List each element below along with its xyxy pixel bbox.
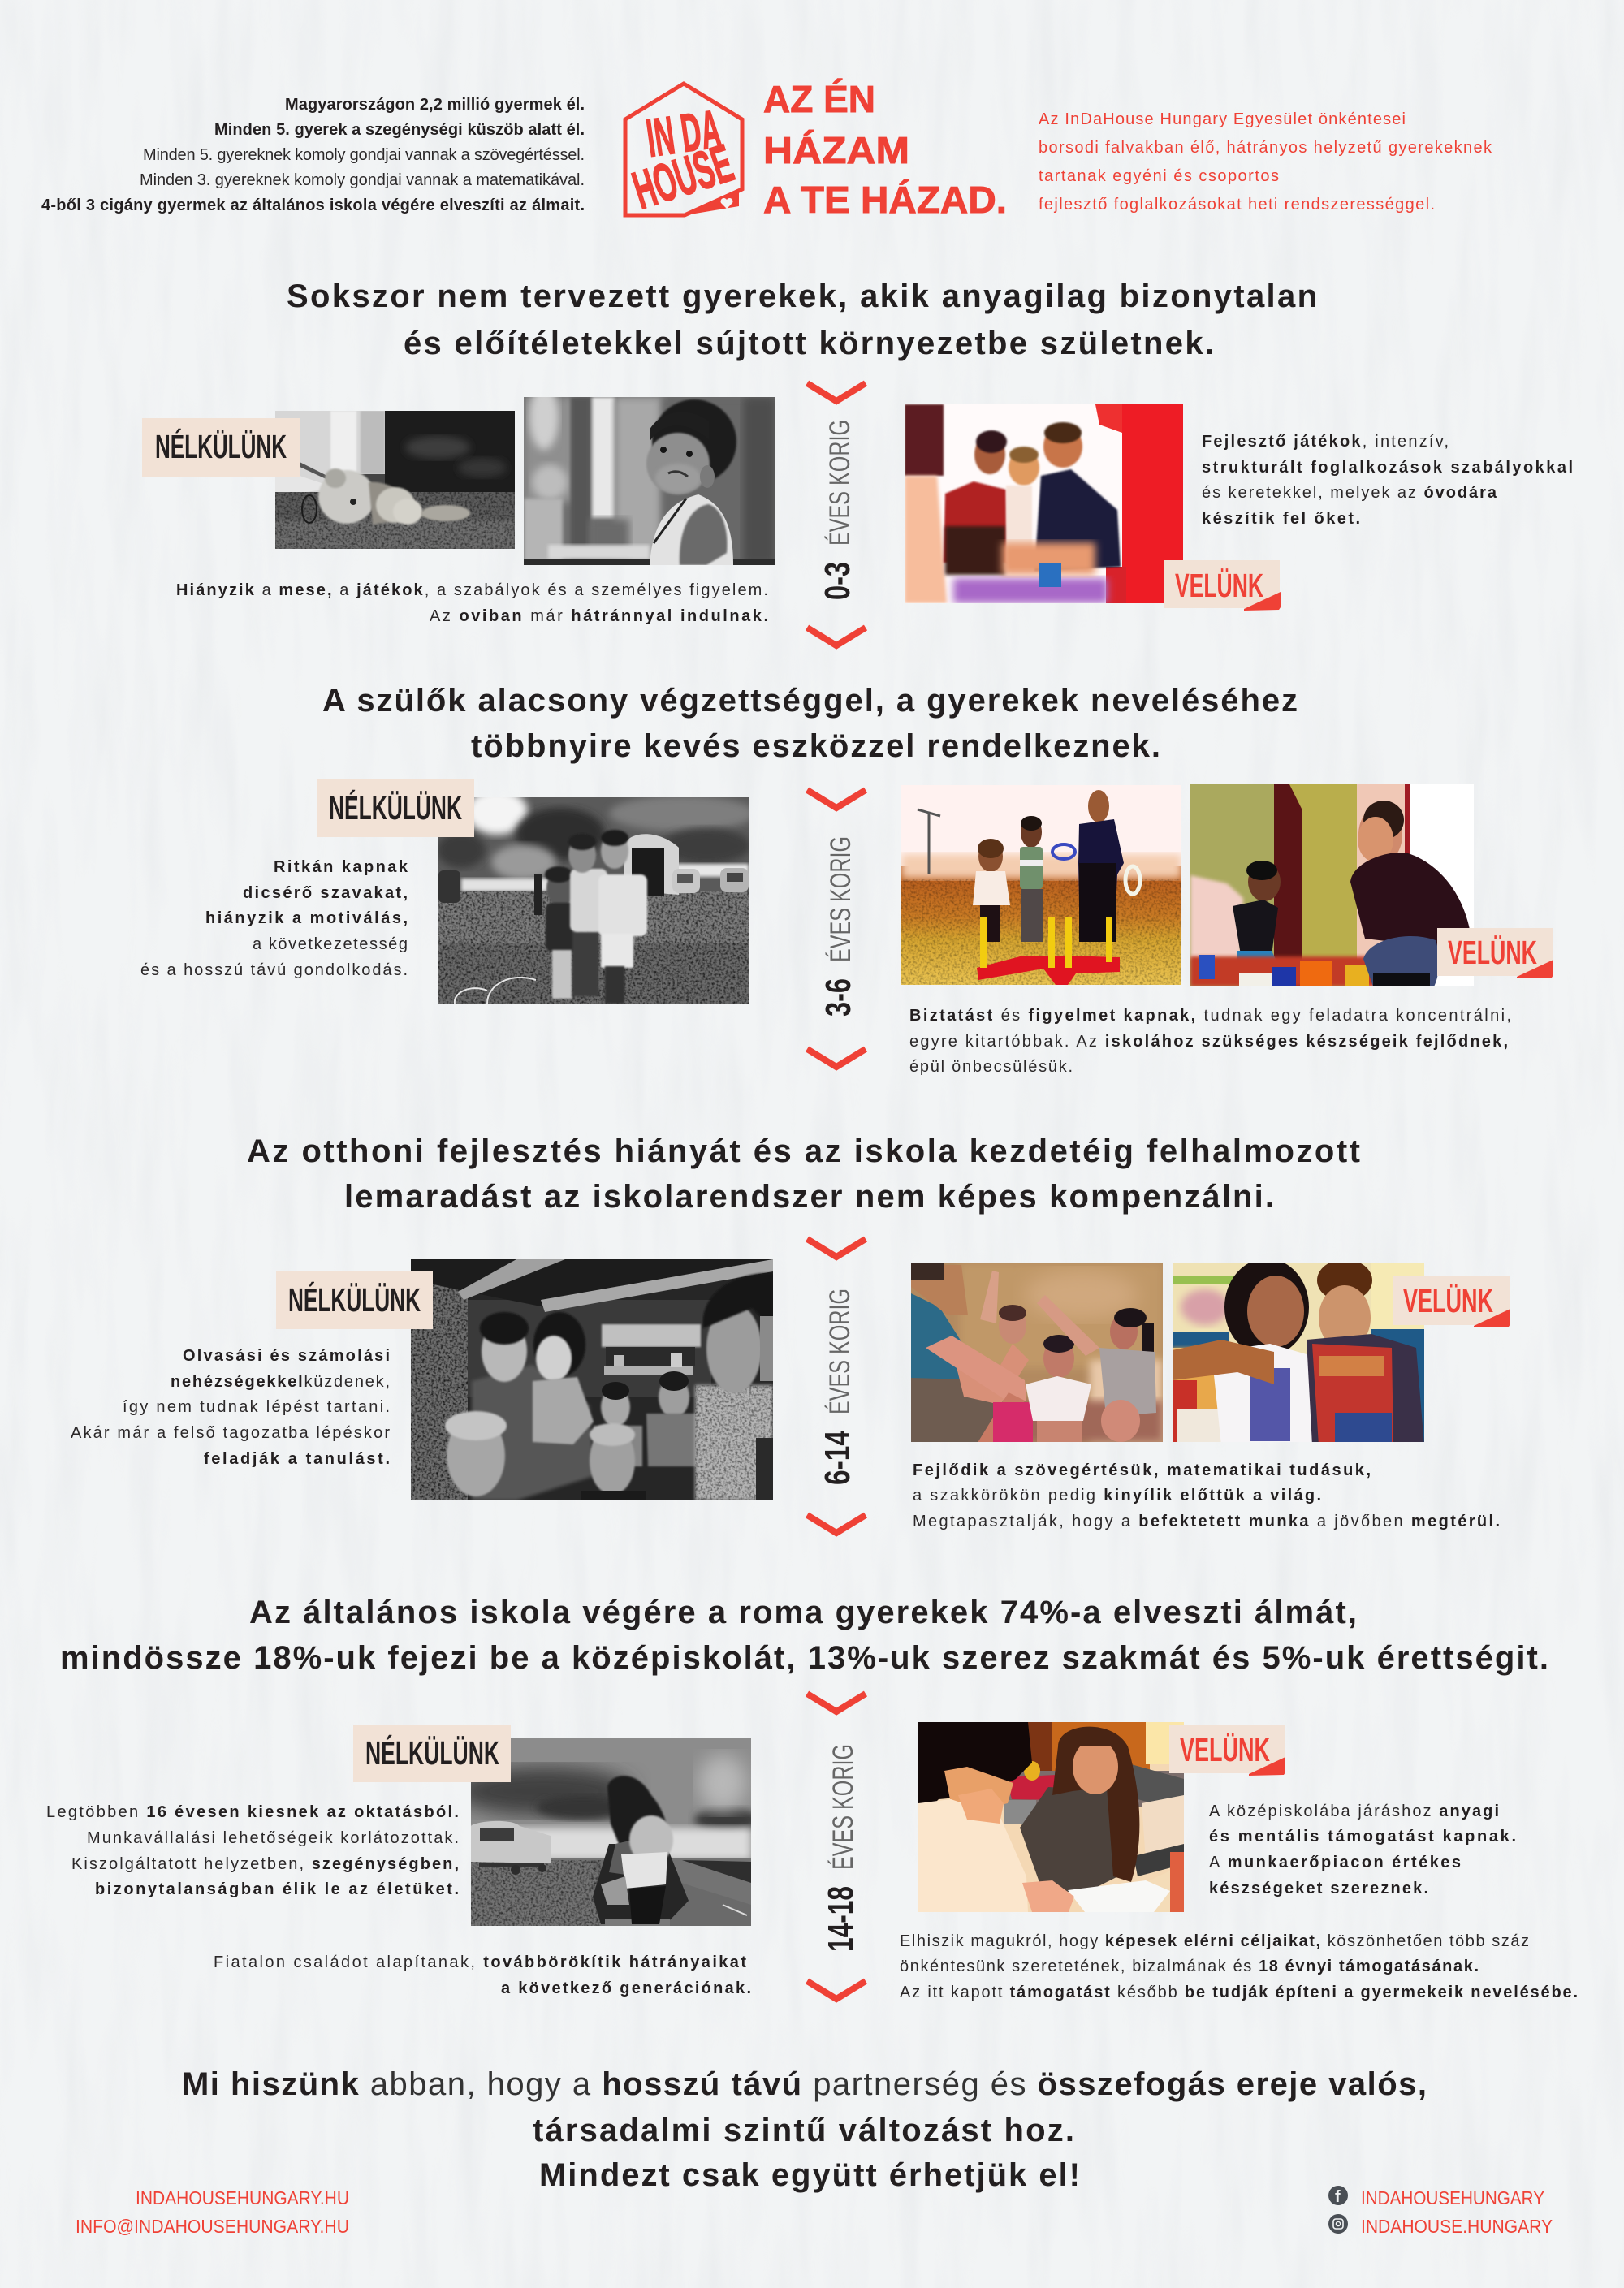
text: section 4 with us: A munkaerőpiacon értékes <box>1209 1854 1461 1871</box>
age label 0-3: ÉVES KORIG <box>824 420 856 546</box>
instagram handle: INDAHOUSE.HUNGARY <box>1361 2216 1553 2237</box>
age label 14-18 <box>821 1744 861 1952</box>
text: section 4 without us, consequence: Fiatalon családot alapítanak, továbbörökítik hátrányaikat <box>214 1953 746 1971</box>
slogan <box>763 78 1007 221</box>
closing statement: Mindezt csak együtt érhetjük el! <box>539 2157 1080 2193</box>
tag: with us <box>1164 560 1281 611</box>
tag: without us: NÉLKÜLÜNK <box>155 428 287 465</box>
contact links: INFO@INDAHOUSEHUNGARY.HU <box>76 2216 349 2237</box>
closing statement <box>182 2066 1427 2193</box>
text: section 1 with us: Fejlesztő játékok, intenzív, <box>1202 433 1449 451</box>
age label 3-6: ÉVES KORIG <box>825 836 857 962</box>
photo: mother with baby <box>471 1738 751 1926</box>
chevron: section 4 top <box>807 1694 866 1712</box>
photo: two smiling children <box>1173 1263 1424 1442</box>
text: section 2 without us: Ritkán kapnak <box>274 858 408 876</box>
photo: teenage girls studying <box>918 1722 1184 1912</box>
text: section 3 with us: Megtapasztalják, hogy a befektetett munka a jövőben megtérül. <box>913 1513 1500 1530</box>
text: section 1 without us <box>176 581 768 625</box>
association description: fejlesztő foglalkozásokat heti rendszerességgel. <box>1039 196 1435 214</box>
age label 0-3: 0-3 <box>818 562 857 600</box>
chevron: section 1 top <box>807 383 866 401</box>
text: section 3 with us <box>913 1461 1500 1530</box>
text: section 4 with us, outcome: Elhiszik magukról, hogy képesek elérni céljaikat, köszönhetően több száz <box>900 1932 1529 1950</box>
intro facts text: Magyarországon 2,2 millió gyermek él. <box>285 96 585 114</box>
tag: with us: VELÜNK <box>1180 1731 1270 1768</box>
photo: family in a poor home <box>411 1259 773 1500</box>
contact links <box>76 2187 349 2237</box>
text: section 4 without us: bizonytalanságban élik le az életüket. <box>95 1880 459 1898</box>
text: section 2 without us: dicsérő szavakat, <box>243 884 408 902</box>
slogan: AZ ÉN <box>763 78 875 120</box>
text: section 4 with us: és mentális támogatást kapnak. <box>1209 1828 1516 1846</box>
text: section 2 without us <box>140 858 408 979</box>
intro facts text: 4-ből 3 cigány gyermek az általános iskola végére elveszíti az álmait. <box>41 196 585 214</box>
heading: section 2: A szülők alacsony végzettséggel, a gyerekek neveléséhez <box>322 683 1298 719</box>
heading: section 2 <box>322 683 1298 764</box>
text: section 3 without us: így nem tudnak lépést tartani. <box>123 1398 390 1416</box>
photo: children ring toss <box>901 785 1181 985</box>
heading: section 1: és előítéletekkel sújtott környezetbe születnek. <box>404 326 1214 361</box>
text: section 2 without us: a következetesség <box>253 935 408 953</box>
tag: with us: VELÜNK <box>1448 934 1537 971</box>
heading: section 4: Az általános iskola végére a roma gyerekek 74%-a elveszti álmát, <box>249 1595 1357 1630</box>
text: section 3 without us: nehézségekkelküzdenek, <box>171 1373 390 1391</box>
age label 6-14 <box>818 1289 857 1485</box>
photo: hands-up game <box>911 1263 1163 1442</box>
logo: In Da House <box>625 84 742 220</box>
photo: teddy bear <box>275 411 515 549</box>
association description: tartanak egyéni és csoportos <box>1039 167 1279 185</box>
chevron: section 4 bottom <box>807 1981 866 1999</box>
text: section 2 with us: egyre kitartóbbak. Az iskolához szükséges készségeik fejlődnek, <box>909 1033 1508 1051</box>
age label 14-18: 14-18 <box>821 1886 861 1952</box>
text: section 4 without us: Legtöbben 16 évesen kiesnek az oktatásból. <box>46 1803 459 1821</box>
text: section 2 with us <box>909 1007 1511 1076</box>
tag: with us: VELÜNK <box>1403 1282 1493 1319</box>
text: section 3 without us: Olvasási és számolási <box>183 1347 390 1365</box>
intro facts text: Minden 5. gyerek a szegénységi küszöb alatt él. <box>214 121 585 139</box>
age label 0-3 <box>818 420 857 600</box>
icon: facebook <box>1328 2186 1348 2206</box>
association description: borsodi falvakban élő, hátrányos helyzetű gyerekeknek <box>1039 139 1492 157</box>
logo: In Da House: IN DA <box>643 98 724 168</box>
text: section 4 with us: A középiskolába járáshoz anyagi <box>1209 1802 1499 1820</box>
closing statement: Mi hiszünk abban, hogy a hosszú távú partnerség és összefogás ereje valós, <box>182 2066 1427 2102</box>
heading: section 1: Sokszor nem tervezett gyerekek, akik anyagilag bizonytalan <box>287 278 1317 314</box>
chevron: section 1 bottom <box>807 628 866 645</box>
text: section 4 without us: Kiszolgáltatott helyzetben, szegénységben, <box>71 1855 459 1873</box>
text: section 1 with us: készítik fel őket. <box>1202 510 1360 528</box>
intro facts text: Minden 5. gyereknek komoly gondjai vannak a szövegértéssel. <box>143 146 585 164</box>
heading: section 3: Az otthoni fejlesztés hiányát és az iskola kezdetéig felhalmozott <box>247 1133 1360 1169</box>
photo: child portrait <box>524 397 775 565</box>
tag: without us: NÉLKÜLÜNK <box>329 789 462 827</box>
heading: section 2: többnyire kevés eszközzel rendelkeznek. <box>471 728 1160 764</box>
tag: with us <box>1169 1725 1285 1776</box>
heading: section 4: mindössze 18%-uk fejezi be a középiskolát, 13%-uk szerez szakmát és 5%-uk érettségit. <box>60 1640 1548 1676</box>
intro facts text: Minden 3. gyereknek komoly gondjai vannak a matematikával. <box>140 171 585 189</box>
tag: without us <box>142 418 300 477</box>
heading: section 3 <box>247 1133 1360 1215</box>
slogan: HÁZAM <box>763 129 909 171</box>
photo: children playing with toys <box>905 404 1183 603</box>
chevron: section 2 bottom <box>807 1049 866 1067</box>
heading: section 4 <box>60 1595 1548 1676</box>
intro facts text <box>41 96 585 214</box>
text: section 4 with us <box>1209 1802 1516 1897</box>
tag: with us: VELÜNK <box>1175 567 1263 604</box>
age label 3-6: 3-6 <box>818 978 858 1017</box>
text: section 2 with us: épül önbecsülésük. <box>909 1058 1073 1076</box>
association description <box>1039 110 1492 214</box>
age label 6-14: ÉVES KORIG <box>824 1289 856 1414</box>
text: section 1 without us: Az oviban már hátránnyal indulnak. <box>430 607 768 625</box>
closing statement: társadalmi szintű változást hoz. <box>533 2113 1074 2148</box>
age label 3-6 <box>818 836 858 1017</box>
age label 14-18: ÉVES KORIG <box>827 1744 859 1870</box>
tag: with us <box>1393 1276 1510 1327</box>
text: section 2 without us: hiányzik a motiválás, <box>205 909 408 927</box>
photo: volunteer with child <box>1190 784 1474 986</box>
text: section 4 with us, outcome: Az itt kapott támogatást később be tudják építeni a gyermekeik nevelésébe. <box>900 1984 1578 2001</box>
text: section 4 with us, outcome: önkéntesünk szeretetének, bizalmának és 18 évnyi támogatásának. <box>900 1958 1479 1975</box>
icon: facebook: f <box>1335 2188 1341 2206</box>
text: section 4 with us, outcome <box>900 1932 1578 2001</box>
tag: without us <box>317 779 474 837</box>
logo: In Da House: HOUSE <box>626 132 740 220</box>
tag: without us: NÉLKÜLÜNK <box>288 1281 421 1319</box>
age label 6-14: 6-14 <box>818 1431 857 1485</box>
text: section 1 without us: Hiányzik a mese, a játékok, a szabályok és a személyes figyelem. <box>176 581 768 599</box>
text: section 4 without us, consequence <box>214 1953 751 1997</box>
heading: section 1 <box>287 278 1317 361</box>
facebook handle: INDAHOUSEHUNGARY <box>1361 2187 1544 2208</box>
text: section 3 without us: Akár már a felső tagozatba lépéskor <box>71 1424 390 1442</box>
chevron: section 3 bottom <box>807 1515 866 1533</box>
chevron: section 3 top <box>807 1239 866 1257</box>
heading: section 3: lemaradást az iskolarendszer nem képes kompenzálni. <box>344 1179 1274 1215</box>
text: section 3 with us: a szakkörökön pedig kinyílik előttük a világ. <box>913 1487 1321 1504</box>
association description: Az InDaHouse Hungary Egyesület önkéntesei <box>1039 110 1406 128</box>
text: section 4 with us: készségeket szereznek. <box>1209 1880 1428 1897</box>
icon: instagram <box>1328 2214 1348 2234</box>
tag: without us <box>276 1271 433 1329</box>
tag: with us <box>1437 928 1553 978</box>
text: section 4 without us <box>46 1803 459 1898</box>
text: section 3 with us: Fejlődik a szövegértésük, matematikai tudásuk, <box>913 1461 1371 1479</box>
contact links: INDAHOUSEHUNGARY.HU <box>136 2187 349 2208</box>
text: section 1 with us: és keretekkel, melyek az óvodára <box>1202 484 1497 502</box>
text: section 1 with us: strukturált foglalkozások szabályokkal <box>1202 459 1573 477</box>
tag: without us: NÉLKÜLÜNK <box>365 1734 499 1772</box>
photo: children at wagons <box>438 797 749 1004</box>
text: section 4 without us: Munkavállalási lehetőségeik korlátozottak. <box>87 1829 459 1847</box>
text: section 1 with us <box>1202 433 1573 528</box>
text: section 4 without us, consequence: a következő generációnak. <box>501 1979 751 1997</box>
slogan: A TE HÁZAD. <box>763 179 1007 221</box>
text: section 3 without us <box>71 1347 390 1468</box>
text: section 2 without us: és a hosszú távú gondolkodás. <box>140 961 408 979</box>
tag: without us <box>353 1725 511 1782</box>
text: section 3 without us: feladják a tanulást. <box>204 1450 390 1468</box>
chevron: section 2 top <box>807 790 866 808</box>
text: section 2 with us: Biztatást és figyelmet kapnak, tudnak egy feladatra koncentrálni, <box>909 1007 1511 1025</box>
